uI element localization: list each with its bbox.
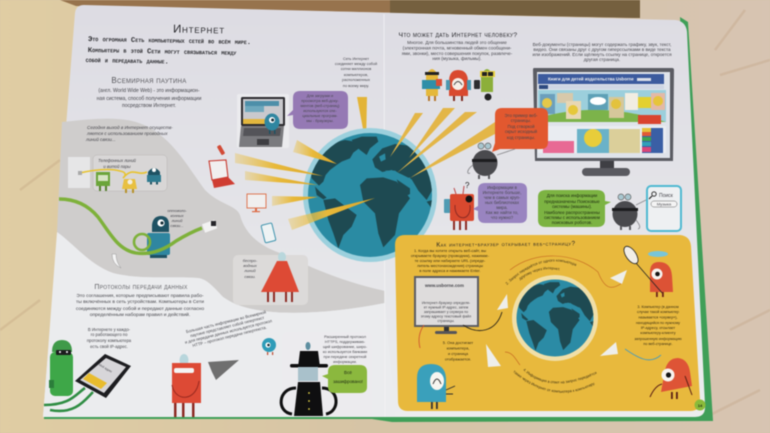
small globe: [512, 275, 598, 361]
browser monitor: ет нужный IP-адрес, затем: [424, 306, 469, 310]
text: step 3: 3. Компьютер (в данном: [637, 305, 679, 309]
monitor with web page: [533, 68, 674, 176]
red trapezoid robot: [261, 261, 299, 292]
text: https: щий шифрование, широ-: [323, 345, 368, 349]
ray above globe: [357, 97, 367, 145]
text: step 5: [443, 340, 473, 362]
text: web documents: другая страница.: [584, 57, 620, 62]
callout: example web page: страницы.: [511, 118, 531, 123]
heading: how the browser opens: Как интернет-браузер открывает веб-страницу?: [436, 240, 576, 249]
robot: teal: [147, 168, 161, 184]
text: internet connects: [335, 57, 377, 88]
browser monitor: запрашивает у сервера по: [424, 310, 468, 314]
text: wireless lines: линий: [243, 268, 256, 273]
curved text: https: и для передачи данных используется протокол: [184, 318, 273, 345]
paper plane 2: [610, 270, 627, 284]
paper plane 3: [600, 342, 618, 356]
white lower page area: [43, 232, 395, 417]
callout: search engines: Наиболее распространены: [544, 210, 600, 215]
text: web documents: или изображений. Если щёлкнуть ссылку на странице, откроется: [532, 51, 672, 57]
text: world wide web description: посредством Интернет.: [122, 103, 176, 109]
robots trio: [422, 69, 495, 101]
bottom arc text: также через Интернет от компьютера к компьютеру.: [513, 370, 595, 394]
laptop with robot: [237, 94, 289, 148]
green cable: [59, 199, 202, 253]
curved text: https: [182, 308, 274, 350]
text: access today: Сегодня выход в Интернет осуществ-: [87, 125, 173, 130]
callout: search engines: предназначены Поисковые: [544, 199, 600, 204]
text: wireless lines: водных: [243, 263, 258, 268]
text: fibre-optic lines: конных: [170, 213, 185, 218]
search phone: Поиск: [659, 193, 674, 199]
top arc text: другому через Интернет.: [519, 266, 560, 281]
text: web documents: [532, 42, 672, 62]
robot: blue: [417, 364, 455, 409]
curved text: https: Большая часть информации во Всемирной: [185, 309, 266, 334]
web page: Книги для детей издательства Usborne: [548, 76, 634, 82]
title: Интернет: Интернет: [173, 24, 225, 36]
text: https: Расширенный протокол: [324, 335, 366, 339]
text: step 1: в поле адреса и нажимаете Enter.: [419, 268, 481, 273]
callout: example web page: скрыт исходный: [505, 129, 538, 134]
text: data protocols: определённым наборам правил и действий.: [90, 311, 190, 318]
browser monitor: [414, 276, 479, 334]
callout: search engines: системы (машины).: [552, 204, 592, 209]
text: data protocols: соединяются между собой и передают данные согласно: [76, 305, 204, 312]
arrow: robot to monitor: [419, 325, 424, 348]
text: step 5: отображается.: [445, 356, 471, 362]
panel: wireless lines robot: [233, 252, 308, 305]
callout: browsers: мы - браузеры.: [306, 118, 334, 123]
crescent decoration: [112, 254, 121, 268]
text: access today: [85, 125, 173, 142]
text: ip address: [87, 327, 132, 349]
intro text: собой и передавать данные.: [86, 57, 169, 67]
paper plane: [208, 360, 239, 380]
callout: browsers: используются спе-: [303, 108, 337, 113]
callout: browsers: просмотра веб-доку-: [301, 98, 339, 103]
callout: search engines: системы с использованием: [544, 215, 600, 220]
robot: green: [96, 172, 110, 191]
robot: yellow with shades: [422, 69, 442, 101]
text: ip address: В Интернете у каждо-: [88, 327, 131, 332]
yellow wires: [80, 170, 147, 178]
callout: search engines: Для поиска информации: [547, 193, 598, 198]
text: internet connects: соединяет между собой: [335, 62, 377, 66]
text: ip address: есть свой IP-адрес.: [90, 344, 128, 349]
callout: too much information: Интернете больше,: [483, 190, 521, 195]
text: step 3: называется «сервер»),: [638, 316, 678, 320]
panel: how the browser opens a web page: [394, 234, 706, 412]
panel: https card: [281, 332, 372, 417]
panel: telephone lines: и витой пары: [103, 164, 131, 169]
text: step 1: литель местонахождения) страницы: [417, 263, 483, 268]
robot: red large: [650, 358, 692, 399]
icon: desktop monitor: [247, 194, 266, 212]
intro text: Компьютеры в этой Сети могут связываться между: [88, 47, 236, 58]
robot: red with paper plane: [172, 354, 239, 417]
text: step 1: [411, 248, 490, 273]
arrow: server to plane: [625, 349, 661, 360]
arrow: upper arc: [510, 256, 622, 287]
callout: encrypted: [322, 365, 367, 393]
text: step 3: компьютеру-клиенту: [640, 331, 676, 335]
web page: [537, 72, 670, 158]
robot: red with headphones: [446, 70, 471, 101]
text: access today: линий связи...: [85, 136, 116, 142]
page number: [694, 400, 706, 410]
callout: too much information: Информации в: [487, 185, 518, 190]
arrow: monitor to plane: [463, 312, 502, 331]
intro text: [86, 36, 251, 68]
text: step 1: 1. Когда вы хотите открыть веб-сайт, вы: [414, 248, 486, 253]
hero strip: [538, 90, 666, 122]
icon: red laptop: [209, 160, 235, 188]
text: step 3: запрошенную информацию: [634, 337, 682, 341]
text: wireless lines: [243, 258, 258, 279]
icon: socket: [78, 171, 82, 175]
callout: example web page: Это пример веб-: [504, 113, 538, 118]
bottom arc text: 4. Информация в ответ на запрос передаётся: [523, 368, 598, 384]
text: fibre-optic lines: [167, 208, 187, 228]
text: ip address: протоколу компьютера: [87, 338, 132, 343]
text: step 3: IP-адресу, отсылает: [641, 326, 675, 330]
text: internet connects: расположенных: [342, 78, 370, 82]
callout: browsers: ментов (веб-страниц): [301, 103, 340, 108]
panel: telephone lines: [68, 155, 167, 193]
text: world wide web description: [97, 88, 202, 109]
icon: fibre plug: [202, 220, 217, 233]
search phone: Музыка: [657, 202, 672, 206]
text: fibre-optic lines: связи...: [170, 223, 184, 228]
icon: magnifier: [649, 192, 656, 199]
robot: small blue: [262, 338, 276, 355]
robot: grey bomb pointing: [468, 143, 515, 179]
callout: example web page: код страницы.: [507, 135, 535, 140]
text: world wide web description: (англ. World Wide Web) - это информацион-: [98, 88, 200, 94]
intro text: Это огромная Сеть компьютерных сетей во всём мире.: [88, 36, 251, 47]
text: step 5: и страница: [448, 351, 469, 356]
text: world wide web description: ная система, способ получения информации: [97, 96, 202, 102]
page banner: [538, 74, 664, 84]
callout: too much information: мира.: [496, 205, 508, 210]
callout: too much information: Как же найти то,: [486, 210, 518, 215]
text: step 5: компьютера,: [447, 346, 469, 350]
text: access today: ляется с использованием проводных: [86, 131, 168, 136]
cables to tablet: [44, 388, 93, 411]
callout: browsers: [287, 91, 348, 129]
callout: example web page: [492, 108, 548, 152]
browser monitor: Интернет-браузер определя-: [422, 301, 471, 305]
panel: telephone lines: Телефонных линий: [98, 158, 137, 163]
heading: world wide web: Всемирная паутина: [111, 76, 187, 85]
robot: grey bomb searching: [612, 194, 652, 230]
grey flowing background shape: [57, 119, 385, 313]
laptop keyboard: [239, 126, 284, 147]
text: web documents: Веб-документы (страницы) могут содержать графику, звук, текст,: [533, 42, 672, 47]
text: data protocols: ты включённых в сеть устройствам. Компьютеры в Сети: [76, 298, 204, 305]
robot: yellow: [122, 179, 137, 193]
robot: red with question mark: ?: [465, 181, 470, 190]
rays over globe: [235, 108, 495, 230]
text: internet connects: компьютеров,: [344, 73, 368, 77]
book spine: [384, 14, 385, 417]
text: step 5: 5. Она достигает: [443, 340, 473, 345]
curved text: https: паутине представляет собой гипертекст: [190, 315, 265, 338]
robot: blue with cable: [147, 216, 170, 258]
paper plane 4: [486, 344, 501, 367]
browser monitor: этому адресу текстовый файл: [421, 314, 471, 318]
callout: search engines: поисковых роботов.: [552, 220, 592, 225]
text: what can the internet give: ями, звонки), место совершения покупок, развлече-: [402, 51, 513, 56]
robot: green with glasses: [474, 69, 495, 100]
text: https: информации.: [333, 360, 357, 364]
text: step 3: находящийся по нужному: [636, 321, 680, 325]
text: what can the internet give: Многое. Для большинства людей это общение: [407, 39, 507, 45]
icon: usb stick: [217, 145, 225, 155]
text: step 3: случае такой компьютер: [637, 310, 679, 314]
text: what can the internet give: ния (музыка, фильмы).: [432, 56, 482, 61]
browser monitor: страницы.: [437, 319, 455, 323]
robot: teal on laptop: [264, 114, 280, 134]
tablet with address: Мой адрес: [98, 363, 113, 374]
callout: encrypted: зашифровано!: [333, 379, 363, 384]
text: web documents: видео. Они связаны друг с другом гиперссылками в виде текста: [533, 47, 671, 52]
text: fibre-optic lines: линий: [171, 218, 183, 223]
text: wireless lines: связи.: [244, 274, 256, 279]
text: what can the internet give: [402, 39, 513, 61]
heading: data protocols: Протоколы передачи данных: [94, 284, 188, 291]
robot: red with net: [621, 244, 673, 297]
text: https: при передаче секретной: [324, 355, 366, 359]
text: step 3: по веб-странице.: [643, 342, 673, 346]
coloured list: [642, 128, 663, 153]
callout: example web page: Под створкой: [508, 124, 535, 129]
callout: search engines: [538, 190, 611, 227]
monitor stand: [600, 161, 614, 170]
text: what can the internet give: (электронная почта, мгновенный обмен сообщени-: [403, 44, 512, 50]
paper plane 1: [497, 294, 508, 310]
text: ip address: го работающего по: [91, 332, 128, 337]
text: https: ко используется банками: [323, 350, 367, 354]
icon: tablet: [261, 223, 276, 243]
text: data protocols: Это соглашения, которые предписывают правила рабо-: [76, 293, 204, 299]
text: fibre-optic lines: оптоволо-: [167, 208, 187, 213]
page nav bar: [538, 85, 664, 89]
callout: browsers: Для загрузки и: [307, 93, 333, 98]
text: wireless lines: беспро-: [243, 258, 258, 263]
heading: what can the internet give: Что может дать Интернет человеку?: [399, 32, 517, 39]
callout: too much information: ных библиотеках: [485, 200, 520, 205]
page number: 14: [698, 403, 703, 408]
robot: spy in black hat: [281, 342, 336, 416]
globe: [303, 128, 437, 262]
callout: browsers: циальные програм-: [302, 113, 338, 118]
laptop screen: [241, 97, 285, 126]
text: internet connects: Сеть Интернет: [343, 57, 369, 61]
top arc text: 2. Запрос передаётся от одного компьютера: [505, 259, 577, 286]
search phone: [647, 186, 681, 231]
text: step 1: те ссылку или набираете URL (опреде-: [415, 258, 486, 263]
curved text: https: HTTP – протокол передачи гипертекста.: [192, 325, 267, 348]
cable loop: [134, 234, 150, 250]
text: data protocols: [76, 293, 204, 318]
browser windows: [245, 101, 279, 106]
robot: red with question mark: [444, 181, 474, 230]
browser monitor: www.usborne.com: [424, 283, 464, 288]
text: https: HTTPS, поддерживаю-: [325, 340, 366, 344]
robot bulb: [278, 252, 286, 262]
callout: too much information: чем в самых круп-: [484, 195, 521, 200]
callout: encrypted: Всё: [344, 370, 352, 375]
text: internet connects: сотни миллионов: [341, 67, 371, 71]
callout: too much information: [473, 183, 527, 223]
callout: too much information: что нужно?: [491, 215, 514, 220]
panel: fibre-optic lines: [59, 199, 217, 258]
text: https: [323, 335, 368, 364]
arrow: plane to robot: [505, 352, 520, 365]
robot: green with tablet: [44, 340, 131, 411]
lower content: [538, 126, 666, 153]
text: step 3: [634, 305, 682, 346]
text: internet connects: по всему миру.: [343, 84, 369, 88]
text: step 1: открываете браузер (проводник), нажимаe-: [411, 253, 490, 258]
